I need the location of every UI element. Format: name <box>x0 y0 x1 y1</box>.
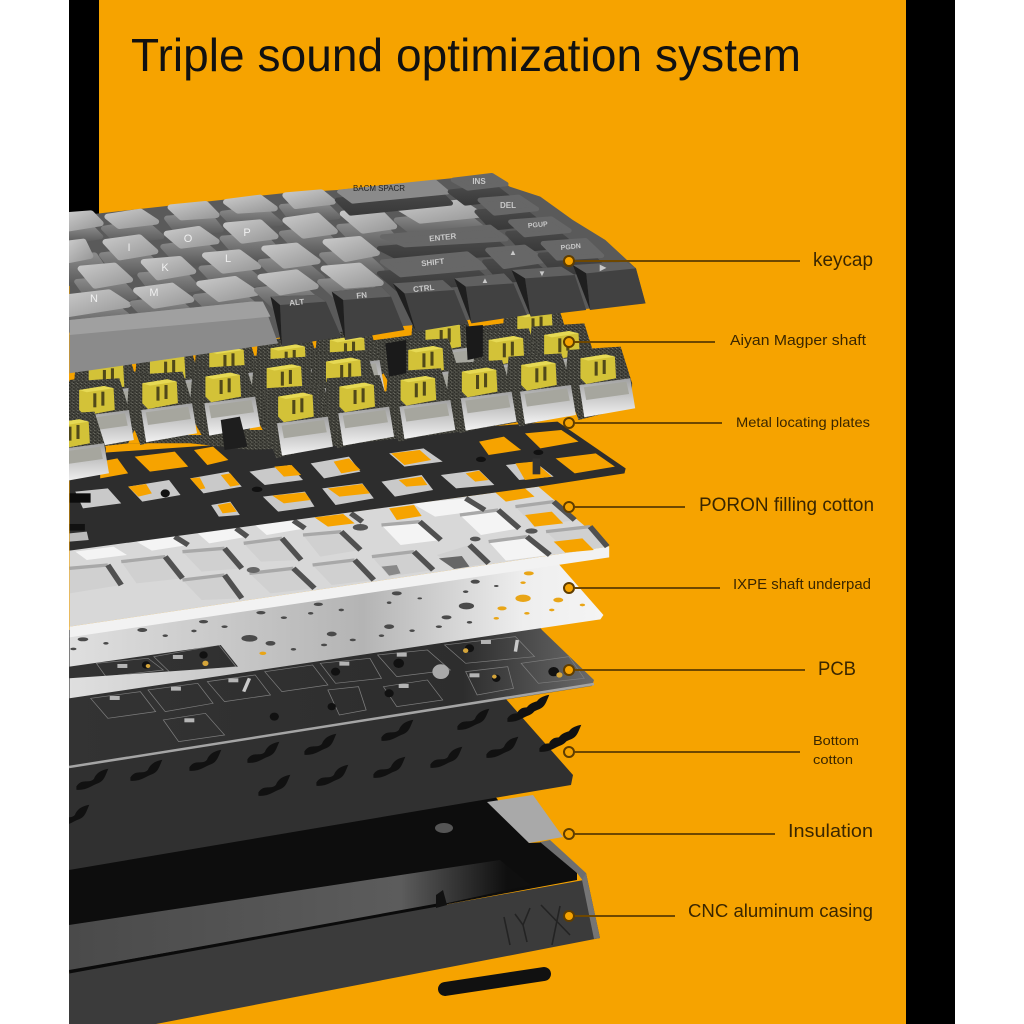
layer: bottom cotton <box>57 690 581 870</box>
keycap legends: CTRL <box>413 283 435 294</box>
callout: Insulation: Insulation <box>788 821 873 841</box>
layer: IXPE shaft underpad <box>70 558 603 698</box>
layer: keycaps <box>70 175 646 373</box>
keycap legends: SHIFT <box>421 257 445 268</box>
switch bed <box>70 323 576 450</box>
callout: IXPE shaft underpad <box>564 577 871 593</box>
keycap legends: K <box>161 262 169 274</box>
callout: IXPE shaft underpad: IXPE shaft underpad <box>733 577 871 593</box>
keycap legends: O <box>184 233 193 245</box>
callout: Aiyan Magper shaft <box>564 333 866 349</box>
callout: PCB <box>564 659 856 680</box>
poron window cut-outs <box>70 488 607 600</box>
keycap legends: ▼ <box>538 269 546 278</box>
layer: Aiyan Magper switches <box>39 303 635 485</box>
casing logo <box>504 905 570 945</box>
callout: Bottom cotton <box>564 733 859 767</box>
front row tall keys <box>270 262 646 347</box>
keycap legends <box>90 177 607 308</box>
keycap legends: ENTER <box>429 232 457 243</box>
keycap legends: ALT <box>289 297 305 308</box>
keycap bed <box>70 175 646 360</box>
middle row switches <box>251 323 599 430</box>
window top walls <box>70 502 590 580</box>
callout: Bottom cotton: cotton <box>813 752 853 767</box>
layer: CNC aluminum casing <box>69 785 600 1024</box>
orange gaps <box>128 373 393 443</box>
layer: metal locating plate <box>70 422 626 551</box>
spacebar <box>70 302 278 373</box>
callout: keycap: keycap <box>813 250 873 271</box>
keycap legends: N <box>90 293 98 305</box>
keycap legends: P <box>243 227 251 239</box>
plate window grey liners <box>75 448 554 517</box>
keycap legends: L <box>225 253 231 265</box>
back row switches <box>73 303 572 428</box>
callout: Aiyan Magper shaft: Aiyan Magper shaft <box>730 333 866 349</box>
callout: CNC aluminum casing: CNC aluminum casing <box>688 901 873 921</box>
callout: PORON filling cotton: PORON filling cotton <box>699 495 874 516</box>
callout: CNC aluminum casing <box>564 901 873 921</box>
keycap legends: ▲ <box>509 248 517 257</box>
casing foot <box>445 974 544 989</box>
standoff pegs <box>507 695 581 752</box>
keycap legends: I <box>127 242 131 254</box>
callout: PCB: PCB <box>818 659 856 680</box>
callout: Bottom cotton: Bottom <box>813 733 859 748</box>
insulation mounting hole <box>435 823 453 833</box>
keycap legends: PGUP <box>528 221 548 230</box>
keycap legends: M <box>149 287 159 299</box>
grey alpha keys <box>70 192 485 330</box>
keycap legends: PGDN <box>560 243 581 252</box>
keycap legends: FN <box>356 290 368 301</box>
keycap legends: ▶ <box>599 263 607 272</box>
window inner shadows <box>108 498 607 598</box>
keycap legends: BACM SPACR <box>353 183 405 193</box>
title: Triple sound optimization system <box>131 29 801 81</box>
callout: PORON filling cotton <box>564 495 874 516</box>
keycap legends: INS <box>472 177 486 186</box>
dark modifier keys <box>337 175 605 290</box>
layer: PORON filling cotton <box>70 487 609 637</box>
callout: keycap <box>564 250 873 271</box>
PCB traces <box>91 637 584 742</box>
plate orange openings <box>100 430 615 513</box>
layer: insulation <box>487 795 563 843</box>
callout: Metal locating plates: Metal locating plates <box>736 414 870 430</box>
keycap legends: DEL <box>500 201 516 210</box>
front row switches <box>39 347 635 485</box>
layer: PCB <box>69 628 594 768</box>
exploded keyboard illustration <box>39 175 646 1024</box>
callout: Metal locating plates <box>564 414 870 430</box>
keycap legends: ▲ <box>481 276 489 285</box>
callout: Insulation <box>564 821 873 841</box>
